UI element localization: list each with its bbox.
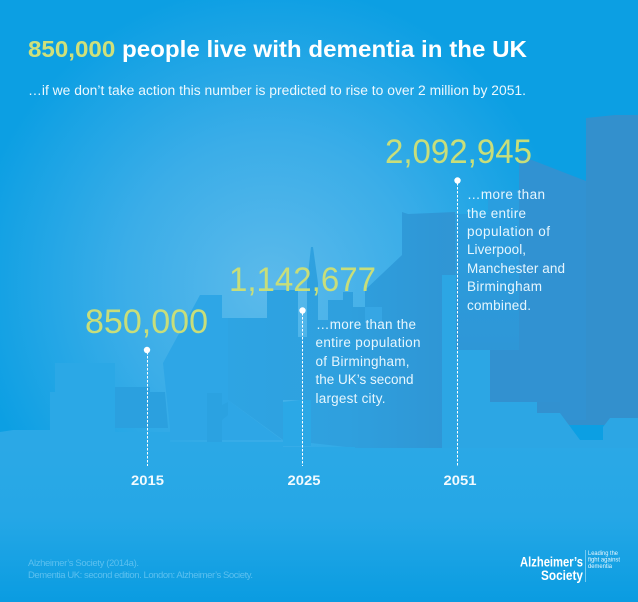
wordmark: Alzheimer’s (520, 554, 583, 570)
note: entire population (316, 335, 420, 350)
year label: 2051 (444, 473, 477, 488)
year label: 2025 (288, 473, 321, 488)
note: Birmingham (467, 279, 542, 294)
wordmark: Society (541, 567, 583, 583)
figure: 2,092,945: 2,092,945 (385, 133, 532, 171)
skyline: right front buildings (442, 275, 638, 460)
timeline: 2025 (229, 261, 425, 488)
dashed line (302, 313, 304, 466)
skyline: lighter strip (365, 307, 382, 321)
skyline: low dark block (115, 387, 168, 428)
strapline: Leading the (588, 550, 618, 557)
note: population of (467, 224, 550, 239)
figure: 1,142,677: 1,142,677 (229, 261, 376, 299)
marker dot (299, 307, 306, 314)
note: combined. (467, 298, 531, 313)
source note: Dementia UK: second edition. London: Alzheimer’s Society. (28, 570, 253, 581)
marker dot (144, 347, 150, 353)
note: largest city. (316, 391, 386, 406)
note: Liverpool, (467, 242, 526, 257)
divider (584, 550, 586, 582)
source note: Alzheimer’s Society (2014a). (28, 558, 139, 569)
skyline: left slanted building (163, 295, 282, 440)
marker dot (454, 177, 461, 184)
year label: 2015 (131, 473, 165, 488)
skyline: left front buildings (0, 363, 442, 470)
note: the UK’s second (316, 372, 414, 387)
note: Manchester and (467, 261, 565, 276)
timeline: 2051 (385, 133, 569, 488)
skyline: main city silhouette (228, 212, 455, 448)
note: …more than (467, 187, 545, 202)
timeline: 2015 (85, 303, 208, 488)
note: of Birmingham, (316, 354, 410, 369)
figure: 850,000: 850,000 (85, 303, 208, 341)
note: …more than the (316, 317, 416, 332)
title: 850,000 people live with dementia in the UK (28, 36, 527, 62)
skyline: right mass (455, 350, 560, 440)
skyline (0, 115, 638, 470)
skyline: slanted tower (519, 155, 586, 420)
note: the entire (467, 206, 526, 221)
skyline: dark narrow block (207, 393, 228, 442)
subtitle: …if we don’t take action this number is predicted to rise to over 2 million by 2051. (28, 83, 526, 98)
ground band (0, 448, 638, 602)
skyline: building behind notes (455, 190, 519, 420)
logo: Alzheimer's Society (520, 550, 622, 583)
strapline: fight against (588, 556, 620, 564)
skyline: centre front building (283, 400, 311, 446)
skyline: tall tower (560, 115, 638, 425)
dashed line (456, 183, 458, 466)
dashed line (146, 352, 148, 466)
strapline: dementia (588, 563, 612, 570)
